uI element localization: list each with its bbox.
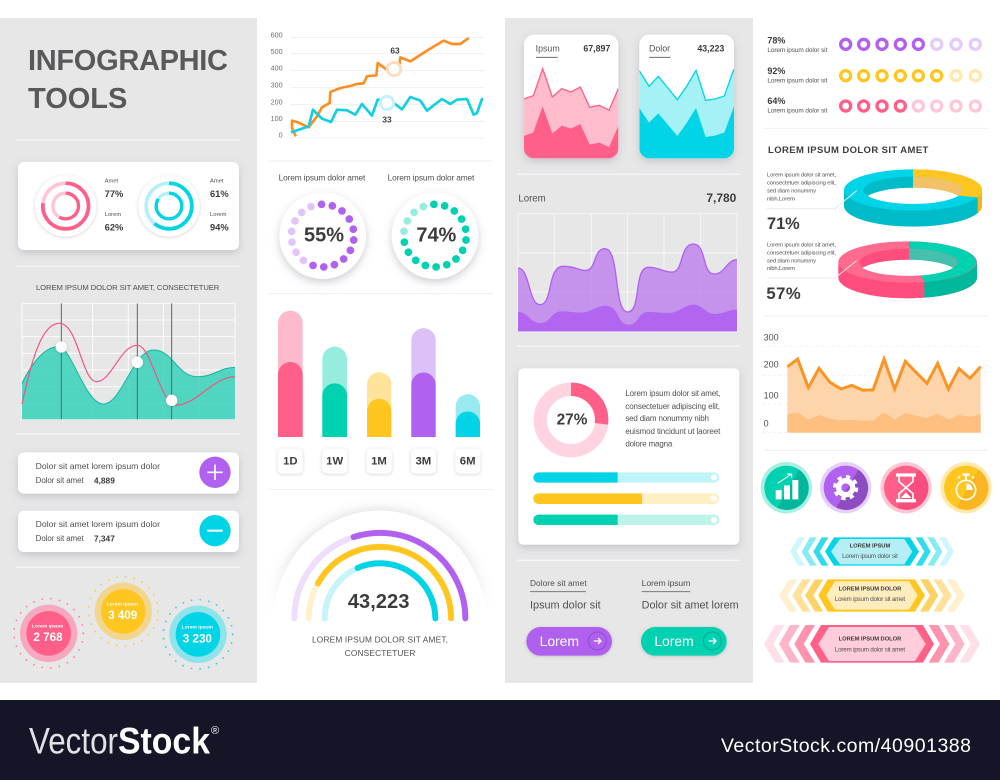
semicircle gauge: CONSECTETUER bbox=[345, 648, 415, 658]
cyan ring values: 61% bbox=[210, 189, 229, 199]
footer band: Vector bbox=[29, 720, 118, 762]
semicircle gauge: 43,223 bbox=[348, 591, 409, 613]
line chart: orange and cyan: 100 bbox=[271, 115, 283, 123]
text block: lorem: Lorem ipsum bbox=[642, 578, 690, 588]
description text: euismod tincidunt ut laoreet bbox=[625, 427, 721, 436]
text block: lorem: Dolor sit amet lorem bbox=[642, 599, 739, 611]
purple stacked area chart: Lorem bbox=[518, 193, 546, 204]
bar: 1W: 1W bbox=[326, 455, 343, 467]
purple stacked area chart bbox=[518, 191, 737, 331]
button: purple: Lorem bbox=[540, 633, 579, 649]
panel: subtract row bbox=[18, 511, 239, 552]
panel: add row: 4,889 bbox=[94, 475, 115, 485]
footer band: ® bbox=[211, 725, 219, 737]
orange area chart bbox=[763, 333, 981, 433]
orange area chart: 200 bbox=[764, 360, 779, 370]
bubble: cyan stat: 3 230 bbox=[183, 632, 212, 645]
pink ring values bbox=[105, 179, 124, 232]
text block: dolore: Dolore sit amet bbox=[530, 578, 587, 588]
chart heading: LOREM IPSUM DOLOR SIT AMET, CONSECTETUER bbox=[36, 283, 220, 292]
icon: stopwatch bbox=[940, 462, 992, 513]
3D ring: 71 percent: Lorem ipsum dolor sit amet, bbox=[767, 173, 836, 179]
3D ring: 57 percent: Lorem ipsum dolor sit amet, bbox=[767, 242, 836, 248]
section heading: LOREM IPSUM DOLOR SIT AMET bbox=[768, 145, 929, 156]
3D ring: 57 percent: 57% bbox=[766, 284, 801, 303]
radial dots gauge: 74 percent: 74% bbox=[416, 225, 457, 247]
radial dots gauge: 74 percent: Lorem ipsum dolor amet bbox=[388, 173, 475, 183]
3D ring: 57 percent: nibh.Lorem bbox=[767, 266, 795, 272]
card: dolor area chart: 43,223 bbox=[697, 44, 724, 54]
progress bar: green bbox=[533, 515, 719, 525]
3D ring: 71 percent bbox=[767, 169, 982, 233]
donut chart: 27 percent: 27% bbox=[557, 411, 588, 428]
line chart: orange and cyan: 200 bbox=[271, 98, 283, 106]
bubble: cyan stat: Lorem ipsum bbox=[182, 625, 214, 631]
3D ring: 57 percent: consectetuer adipiscing elit, bbox=[767, 250, 836, 256]
card: ipsum area chart: 67,897 bbox=[583, 44, 610, 54]
banner: pink arrows bbox=[764, 625, 980, 663]
footer band bbox=[0, 700, 1000, 780]
pink ring values: 77% bbox=[105, 189, 124, 199]
line chart: orange and cyan: 500 bbox=[271, 48, 283, 56]
description text: consectetuer adipiscing elit, bbox=[625, 402, 720, 411]
button: green: Lorem bbox=[654, 633, 694, 649]
cyan ring values: Lorem bbox=[210, 212, 227, 218]
banner: yellow arrows: LOREM IPSUM DOLOR bbox=[839, 587, 902, 593]
banner: yellow arrows bbox=[779, 579, 965, 612]
description text bbox=[625, 389, 721, 448]
bar: 1D bbox=[278, 311, 303, 474]
line chart: orange and cyan: 0 bbox=[279, 132, 283, 140]
rating row: purple bbox=[767, 35, 980, 54]
panel: add row: Dolor sit amet lorem ipsum dolor bbox=[36, 461, 160, 471]
bar: 1W bbox=[322, 347, 347, 474]
line and area chart bbox=[22, 303, 235, 419]
icon: hourglass bbox=[880, 462, 932, 513]
pink ring values: Lorem bbox=[105, 212, 121, 218]
pink ring values: 62% bbox=[105, 222, 124, 232]
panel: add row: Dolor sit amet bbox=[36, 476, 84, 485]
rating row: yellow: Lorem ipsum dolor sit bbox=[767, 77, 828, 84]
radial dots gauge: 74 percent bbox=[388, 173, 478, 279]
3D ring: 71 percent: consectetuer adipiscing elit, bbox=[767, 181, 836, 187]
line chart: orange and cyan bbox=[271, 31, 485, 140]
3D ring: 57 percent: sed diam nonummy bbox=[767, 258, 816, 264]
semicircle gauge: LOREM IPSUM DOLOR SIT AMET, bbox=[312, 634, 448, 644]
panel: radial progress card bbox=[18, 162, 239, 250]
banner: cyan arrows bbox=[790, 537, 954, 566]
radial dots gauge: 55 percent bbox=[279, 173, 366, 279]
text block: lorem bbox=[642, 578, 739, 611]
banner: pink arrows: Lorem ipsum dolor sit amet bbox=[835, 646, 905, 653]
orange area chart: 0 bbox=[764, 418, 769, 428]
text block: dolore: Ipsum dolor sit bbox=[530, 599, 601, 611]
bar: 1D: 1D bbox=[283, 455, 298, 467]
title bbox=[28, 45, 228, 115]
description text: sed diam nonummy nibh bbox=[625, 414, 709, 423]
orange area chart: 100 bbox=[764, 390, 779, 400]
bubble: pink stat: Lorem ipsum bbox=[32, 624, 64, 630]
rating row: yellow: 92% bbox=[767, 66, 785, 76]
line chart: orange and cyan: 400 bbox=[271, 64, 283, 72]
line chart: orange and cyan: 63 bbox=[390, 46, 400, 56]
purple stacked area chart: 7,780 bbox=[706, 191, 737, 205]
panel: subtract row: 7,347 bbox=[94, 534, 115, 544]
bar chart: time ranges bbox=[278, 311, 480, 474]
radial dots gauge: 55 percent: 55% bbox=[304, 225, 344, 247]
rating row: pink bbox=[767, 96, 980, 114]
rating row: pink: 64% bbox=[767, 96, 785, 106]
bubble: cyan stat bbox=[163, 600, 233, 669]
rating row: pink: Lorem ipsum dolor sit bbox=[767, 107, 828, 114]
card: dolor area chart bbox=[639, 35, 734, 158]
button: purple bbox=[526, 627, 612, 656]
description text: dolore magna bbox=[625, 439, 673, 448]
description text: Lorem ipsum dolor sit amet, bbox=[625, 389, 720, 398]
line chart: orange and cyan: 33 bbox=[382, 114, 392, 124]
cyan double ring gauge bbox=[138, 175, 200, 237]
banner: pink arrows: LOREM IPSUM DOLOR bbox=[839, 636, 902, 642]
bubble: yellow stat: Lorem ipsum bbox=[107, 601, 139, 607]
progress bar: yellow bbox=[533, 493, 719, 504]
bubble: yellow stat: 3 409 bbox=[108, 609, 138, 622]
3D ring: 71 percent: 71% bbox=[767, 215, 800, 233]
bubble: pink stat: 2 768 bbox=[33, 631, 63, 644]
3D ring: 71 percent: sed diam nonummy bbox=[767, 189, 816, 195]
rating row: purple: 78% bbox=[767, 35, 785, 45]
line chart: orange and cyan: 600 bbox=[271, 31, 283, 39]
bar: 1M bbox=[367, 372, 392, 474]
icon: growth chart bbox=[761, 462, 812, 513]
pink double ring gauge bbox=[35, 175, 96, 237]
title: TOOLS bbox=[28, 83, 127, 115]
panel: donut and progress card bbox=[518, 368, 739, 545]
bubble: pink stat bbox=[14, 599, 83, 668]
bar: 3M bbox=[411, 328, 436, 474]
radial dots gauge: 55 percent: Lorem ipsum dolor amet bbox=[279, 173, 366, 183]
card: ipsum area chart: Ipsum bbox=[536, 44, 560, 54]
rating row: yellow bbox=[767, 66, 980, 84]
cyan ring values: 94% bbox=[210, 222, 229, 232]
panel: add row bbox=[18, 452, 239, 494]
button: green bbox=[641, 627, 727, 656]
icon: minus bbox=[199, 515, 231, 546]
bar: 3M: 3M bbox=[415, 455, 431, 467]
panel: subtract row: Dolor sit amet bbox=[36, 534, 84, 543]
banner: cyan arrows: Lorem ipsum dolor sit bbox=[842, 553, 898, 560]
rating row: purple: Lorem ipsum dolor sit bbox=[767, 47, 828, 54]
line chart: orange and cyan: 300 bbox=[271, 81, 283, 89]
card: ipsum area chart bbox=[524, 35, 618, 158]
card: dolor area chart: Dolor bbox=[649, 44, 670, 54]
icon: gear bbox=[820, 462, 871, 513]
bar: 6M: 6M bbox=[460, 455, 476, 467]
progress bar: cyan bbox=[533, 472, 719, 483]
3D ring: 71 percent: nibh.Lorem bbox=[767, 196, 795, 202]
title: INFOGRAPHIC bbox=[28, 45, 228, 77]
banner: cyan arrows: LOREM IPSUM bbox=[850, 544, 890, 550]
footer band: VectorStock.com/40901388 bbox=[721, 735, 971, 757]
orange area chart: 300 bbox=[764, 333, 779, 343]
icon: plus bbox=[199, 457, 231, 488]
banner: yellow arrows: Lorem ipsum dolor sit amet bbox=[835, 596, 905, 603]
bubble: yellow stat bbox=[89, 577, 158, 646]
cyan ring values: Amet bbox=[210, 179, 224, 185]
text block: dolore bbox=[530, 578, 601, 611]
bar: 6M bbox=[455, 394, 480, 474]
3D ring: 57 percent bbox=[766, 241, 977, 303]
cyan ring values bbox=[210, 179, 229, 232]
pink ring values: Amet bbox=[105, 179, 119, 185]
panel: subtract row: Dolor sit amet lorem ipsum dolor bbox=[36, 519, 160, 529]
bar: 1M: 1M bbox=[371, 455, 387, 467]
donut chart: 27 percent bbox=[540, 389, 602, 451]
semicircle gauge bbox=[257, 511, 505, 663]
footer band: Stock bbox=[118, 720, 210, 762]
